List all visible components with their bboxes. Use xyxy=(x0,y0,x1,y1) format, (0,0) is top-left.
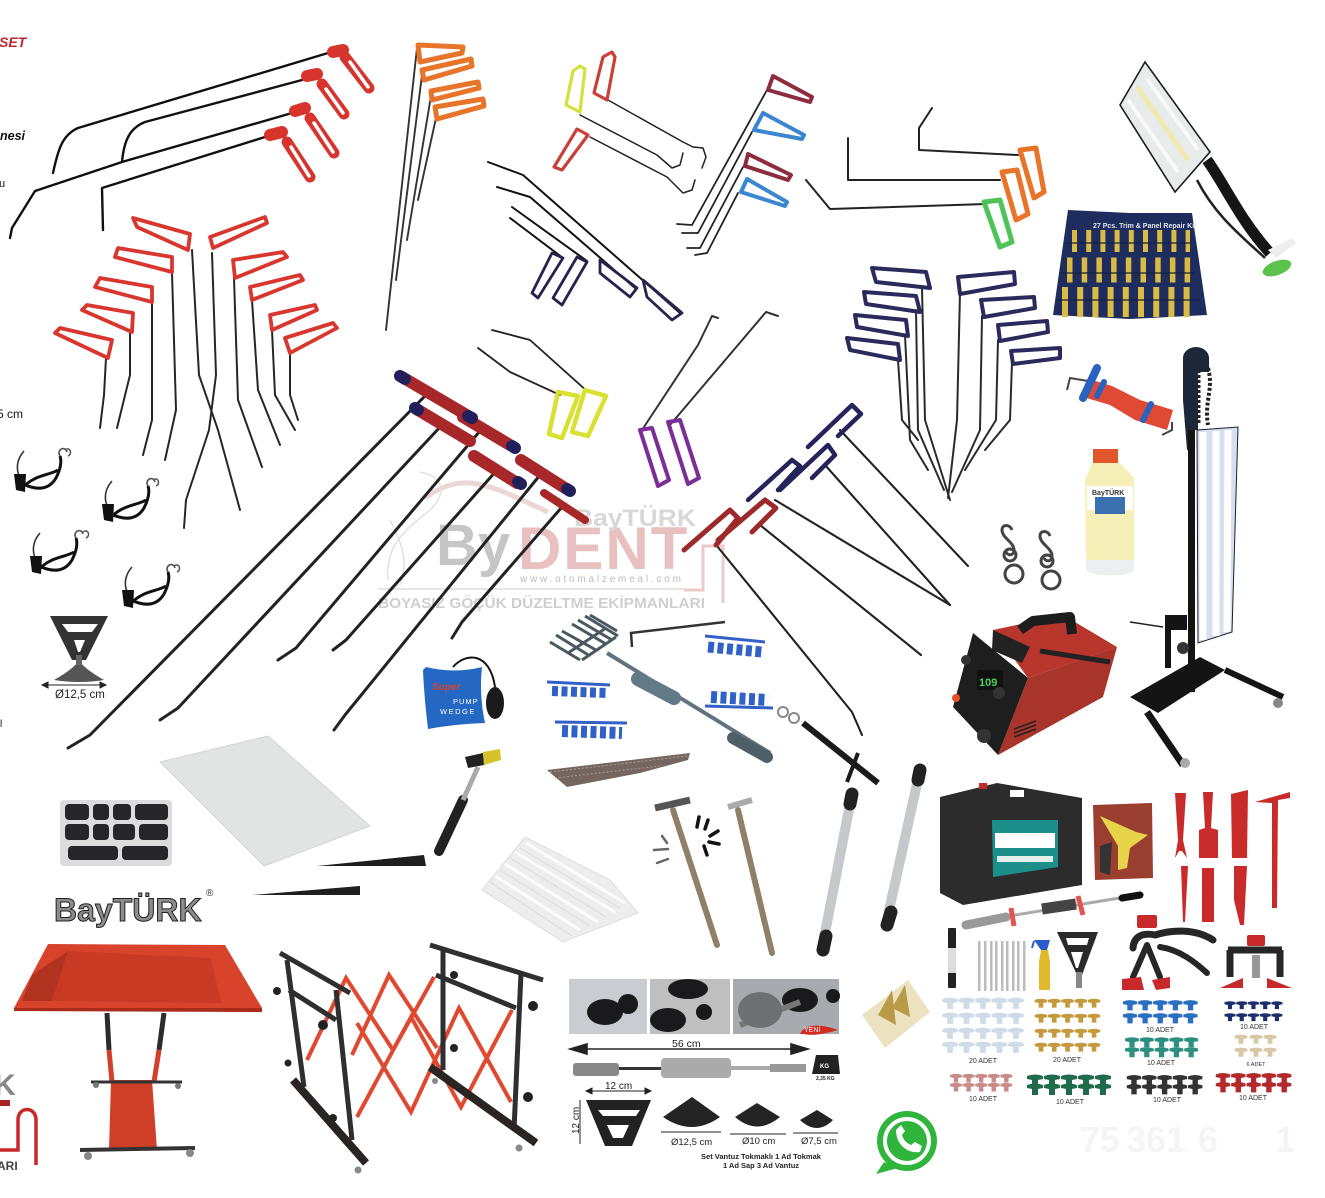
yellow handled rods xyxy=(478,330,606,438)
rubber hook cords xyxy=(14,449,180,608)
red trim tools xyxy=(1175,790,1290,925)
tabs: green 10: 10 ADET xyxy=(1056,1099,1085,1106)
tabs: red 10: 10 ADET xyxy=(1239,1095,1268,1102)
set panel: photos and sizes xyxy=(569,979,840,1170)
tabs: white 20 xyxy=(942,998,1024,1065)
watermark logo: BayTÜRK xyxy=(574,505,697,532)
bridge puller xyxy=(1220,935,1292,988)
orange-handled rods xyxy=(386,45,484,330)
navy hook rods right xyxy=(847,268,1060,500)
cut-off caption: nesi: nesi xyxy=(0,129,26,143)
red spot welder box xyxy=(952,615,1117,755)
glue remover bottle xyxy=(1085,449,1134,575)
crimson and blue handled rods xyxy=(677,76,812,255)
blue air pump wedge: Super xyxy=(432,682,461,693)
watermark logo: DENT xyxy=(518,515,689,582)
tabs: pink 10 xyxy=(950,1074,1012,1103)
colored T hooks top center xyxy=(554,52,706,193)
plastic sheet xyxy=(160,736,370,866)
second slide hammer xyxy=(966,895,1140,926)
tabs: navy 10: 10 ADET xyxy=(1240,1024,1269,1031)
watermark logo: BOYASIZ GÖÇÜK DÜZELTME EKİPMANLARI xyxy=(378,595,705,612)
hex key xyxy=(631,622,725,647)
suction cup handle with size: Ø12,5 cm xyxy=(55,689,105,701)
small hammer xyxy=(439,749,501,851)
set panel: photos and sizes: 12 cm xyxy=(571,1107,582,1134)
large T-handle rods xyxy=(68,376,585,748)
faint phone number: 75 xyxy=(1080,1119,1120,1160)
navy tool roll with yellow tabs xyxy=(1053,210,1207,319)
step drill box xyxy=(862,980,930,1048)
tube sliders xyxy=(823,770,920,950)
glue gun package xyxy=(1093,803,1153,880)
tabs: dark grey 10 xyxy=(1127,1075,1202,1104)
tabs: beige 6: 6 ADET xyxy=(1247,1062,1266,1068)
cut-off caption: mark: l xyxy=(0,719,2,730)
LED lamp top right xyxy=(1120,62,1296,280)
tabs: gold 20: 20 ADET xyxy=(1053,1057,1082,1064)
glue sticks xyxy=(482,837,638,942)
set panel: photos and sizes: Ø7,5 cm xyxy=(801,1136,837,1147)
set panel: photos and sizes: 2,35 KG xyxy=(816,1076,835,1082)
bin of black tabs xyxy=(60,800,172,866)
tabs: beige 6 xyxy=(1235,1035,1276,1068)
whatsapp icon xyxy=(876,1111,937,1174)
T handle lifter xyxy=(1057,932,1098,988)
dent hammers with tips xyxy=(654,800,772,953)
orange and green handled rods xyxy=(806,108,1044,247)
purple-blue handled rods center xyxy=(488,162,682,320)
blue air pump wedge xyxy=(423,657,504,729)
set panel: photos and sizes: 1 Ad Sap 3 Ad Vantuz xyxy=(723,1161,799,1170)
marker, sticks and spray xyxy=(948,928,1050,991)
tabs: red 10 xyxy=(1216,1073,1291,1102)
set panel: photos and sizes: Set Vantuz Tokmaklı 1 Ad Tokmak xyxy=(701,1152,822,1161)
black wedges xyxy=(252,855,426,895)
BayTurk logo: BayTÜRK xyxy=(54,892,202,928)
faint phone number: 361 xyxy=(1126,1119,1186,1160)
watermark logo: By xyxy=(436,513,510,578)
BayTurk logo: ® xyxy=(206,888,214,899)
glue remover bottle: BayTÜRK xyxy=(1092,488,1124,497)
mini lifter red xyxy=(1122,915,1213,990)
crimson and navy rods center right xyxy=(684,405,968,735)
red hook rods fan xyxy=(55,217,337,528)
tabs: navy 10 xyxy=(1224,1001,1282,1031)
set panel: photos and sizes: Ø12,5 cm xyxy=(671,1137,712,1148)
set panel: photos and sizes: KG xyxy=(820,1064,829,1070)
blue air pump wedge: PUMP xyxy=(453,697,479,706)
tabs: gold 20 xyxy=(1035,999,1100,1064)
faint phone number: 6 xyxy=(1198,1119,1218,1160)
watermark logo xyxy=(378,472,723,612)
set panel: photos and sizes: YENİ xyxy=(804,1025,820,1034)
faint phone number: 1 xyxy=(1275,1119,1295,1160)
black case xyxy=(940,783,1082,905)
tabs: white 20: 20 ADET xyxy=(969,1058,998,1065)
faint phone number xyxy=(1080,1119,1295,1160)
tabs: dark grey 10: 10 ADET xyxy=(1153,1097,1182,1104)
folding rack xyxy=(273,945,543,1174)
blue air pump wedge: WEDGE xyxy=(440,707,476,716)
set panel: photos and sizes: 12 cm xyxy=(605,1081,632,1092)
set panel: photos and sizes: 56 cm xyxy=(672,1038,701,1050)
tabs: pink 10: 10 ADET xyxy=(969,1096,998,1103)
purple handled rods xyxy=(640,312,778,486)
set panel: photos and sizes: Ø10 cm xyxy=(742,1136,775,1147)
slide hammer with tabs xyxy=(547,615,878,783)
blue red puller tool xyxy=(1067,368,1173,435)
tabs: blue 10 xyxy=(1123,1000,1198,1034)
tabs: teal 10 xyxy=(1125,1037,1198,1067)
LED light stand xyxy=(1130,347,1283,768)
navy tool roll with yellow tabs: 27 Pcs. Trim & Panel Repair Kit xyxy=(1093,223,1197,230)
suction cup handle with size xyxy=(42,616,108,701)
tabs: teal 10: 10 ADET xyxy=(1147,1060,1176,1067)
S hooks and rings xyxy=(1002,526,1060,589)
watermark logo: www.otomalzemeal.com xyxy=(519,574,681,585)
tabs: blue 10: 10 ADET xyxy=(1146,1027,1175,1034)
cut-off bottom left logo xyxy=(0,1069,36,1173)
brown mesh strip xyxy=(547,753,690,787)
red spot welder box: 109 xyxy=(979,677,997,689)
tabs: green 10 xyxy=(1027,1074,1111,1106)
long red-handled rods top left xyxy=(10,50,369,238)
red tool table xyxy=(14,944,262,1160)
